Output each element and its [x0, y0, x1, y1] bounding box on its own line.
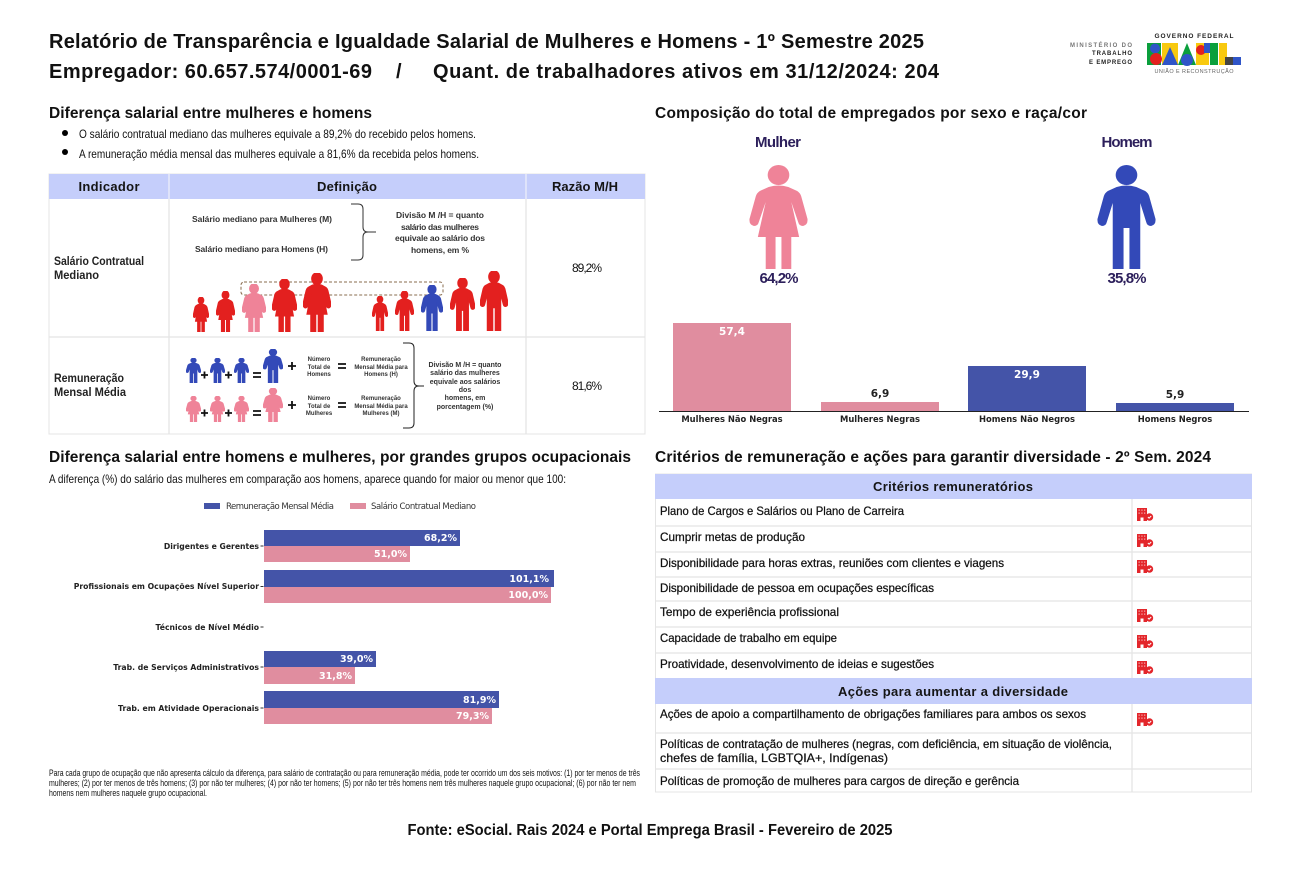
- heading: grandes grupos ocupacionais: Diferença salarial entre homens e mulheres, por grandes grupos ocupacionais: [49, 449, 631, 466]
- bar chart: grupos ocupacionais: Profissionais em Ocupações Nível Superior: [74, 582, 259, 591]
- definição: remuneração média: dos: [459, 387, 471, 394]
- subtítulo: A diferença (%) do salário das mulheres em comparação aos homens, aparece quando for maior ou menor que 100:: [49, 472, 566, 486]
- icons: empresa com check: [1137, 508, 1153, 726]
- bar chart: grupos ocupacionais: 81,9%: [463, 695, 496, 706]
- panel: critérios e ações: Plano de Cargos e Salários ou Plano de Carreira: [660, 504, 904, 518]
- bar chart: grupos ocupacionais: 79,3%: [456, 711, 489, 722]
- legenda: [204, 501, 476, 512]
- panel: tabela de indicadores: Indicador: [78, 179, 140, 194]
- panel: critérios e ações: Políticas de promoção de mulheres para cargos de direção e gerência: [660, 774, 1019, 788]
- panel: critérios e ações: Ações de apoio a compartilhamento de obrigações familiares para ambos os sexos: [660, 707, 1086, 721]
- panel: critérios e ações: Ações para aumentar a diversidade: [838, 684, 1068, 699]
- icon: homem 35,8%: Homem: [1102, 134, 1152, 151]
- definição: remuneração média: Mulheres (M): [362, 411, 400, 417]
- title: /: [396, 61, 402, 83]
- icon: mulher 64,2%: Mulher: [755, 134, 801, 151]
- heading: critérios: Critérios de remuneração e ações para garantir diversidade - 2º Sem. 2024: [655, 449, 1211, 466]
- bar chart: grupos ocupacionais: 31,8%: [319, 671, 352, 682]
- title: [49, 31, 940, 83]
- definição: salário mediano: homens, em %: [411, 245, 469, 255]
- title: Relatório de Transparência e Igualdade Salarial de Mulheres e Homens - 1º Semestre 2025: [49, 31, 924, 53]
- definição: remuneração média: [186, 343, 501, 428]
- logo: ministério e governo federal: TRABALHO: [1092, 51, 1132, 57]
- panel: critérios e ações: Critérios remuneratórios: [873, 479, 1033, 494]
- nota de rodapé: mulheres; (2) por ter menos de três homens; (3) por não ter mulheres; (4) por não ter homens; (5) por não ter três homens nem três mulheres naquele grupo ocupacional; (6) por não ter nem: [49, 778, 636, 788]
- fonte: Fonte: eSocial. Rais 2024 e Portal Emprega Brasil - Fevereiro de 2025: [408, 822, 893, 839]
- bar chart: composição: [659, 323, 1249, 424]
- definição: remuneração média: Total de: [308, 404, 331, 410]
- definição: remuneração média: Remuneração: [361, 357, 401, 363]
- logo: ministério e governo federal: [1070, 33, 1241, 75]
- bar chart: grupos ocupacionais: [74, 530, 554, 724]
- definição: remuneração média: porcentagem (%): [437, 404, 493, 411]
- bar chart: grupos ocupacionais: Trab. de Serviços Administrativos: [113, 663, 259, 672]
- definição: remuneração média: salário das mulheres: [430, 370, 500, 377]
- logo: ministério e governo federal: GOVERNO FEDERAL: [1154, 33, 1234, 40]
- bullets: A remuneração média mensal das mulheres equivale a 81,6% da recebida pelos homens.: [79, 147, 479, 161]
- logo: ministério e governo federal: MINISTÉRIO DO: [1070, 41, 1132, 49]
- panel: critérios e ações: Cumprir metas de produção: [660, 530, 805, 544]
- definição: salário mediano: equivale ao salário dos: [395, 233, 485, 243]
- panel: tabela de indicadores: 89,2%: [572, 261, 602, 275]
- panel: critérios e ações: Tempo de experiência profissional: [660, 605, 839, 619]
- panel: tabela de indicadores: Mediano: [54, 268, 99, 282]
- bar chart: composição: 5,9: [1166, 389, 1184, 401]
- definição: remuneração média: Total de: [308, 365, 331, 371]
- definição: remuneração média: Mensal Média para: [354, 404, 408, 410]
- icon: homem 35,8%: [1097, 134, 1156, 287]
- bar chart: grupos ocupacionais: Técnicos de Nível Médio: [156, 623, 259, 632]
- nota de rodapé: [49, 768, 640, 798]
- bar chart: grupos ocupacionais: 100,0%: [508, 590, 548, 601]
- nota de rodapé: homens nem mulheres naquele grupo ocupacional.: [49, 788, 207, 798]
- bar chart: grupos ocupacionais: 39,0%: [340, 654, 373, 665]
- definição: remuneração média: Mensal Média para: [354, 365, 408, 371]
- panel: critérios e ações: Capacidade de trabalho em equipe: [660, 631, 837, 645]
- definição: salário mediano: [192, 204, 508, 332]
- title: Quant. de trabalhadores ativos em 31/12/2024: 204: [433, 61, 940, 83]
- bar chart: composição: 29,9: [1014, 369, 1040, 381]
- icon: mulher 64,2%: [749, 134, 808, 287]
- bar chart: composição: 57,4: [719, 326, 745, 338]
- definição: remuneração média: Mulheres: [306, 411, 333, 417]
- definição: remuneração média: Remuneração: [361, 396, 401, 402]
- bar chart: grupos ocupacionais: 51,0%: [374, 549, 407, 560]
- panel: tabela de indicadores: [49, 174, 645, 434]
- panel: tabela de indicadores: Razão M/H: [552, 179, 618, 194]
- legenda: Remuneração Mensal Média: [226, 501, 334, 512]
- definição: remuneração média: Número: [308, 396, 331, 402]
- definição: salário mediano: Divisão M /H = quanto: [396, 210, 484, 220]
- definição: salário mediano: Salário mediano para Mulheres (M): [192, 214, 332, 224]
- heading: composição: Composição do total de empregados por sexo e raça/cor: [655, 105, 1087, 122]
- definição: remuneração média: homens, em: [445, 395, 485, 402]
- panel: critérios e ações: [655, 474, 1252, 792]
- legenda: Salário Contratual Mediano: [371, 502, 476, 512]
- panel: tabela de indicadores: Remuneração: [54, 371, 124, 385]
- panel: tabela de indicadores: Definição: [317, 179, 377, 194]
- logo: ministério e governo federal: E EMPREGO: [1089, 60, 1132, 66]
- title: Empregador: 60.657.574/0001-69: [49, 61, 372, 83]
- bar chart: grupos ocupacionais: 101,1%: [509, 574, 549, 585]
- bar chart: grupos ocupacionais: Dirigentes e Gerentes: [164, 542, 259, 551]
- bar chart: composição: Mulheres Negras: [840, 414, 920, 424]
- bar chart: grupos ocupacionais: Trab. em Atividade Operacionais: [118, 704, 259, 713]
- bar chart: composição: 6,9: [871, 388, 889, 400]
- bar chart: composição: Homens Não Negros: [979, 414, 1075, 424]
- panel: tabela de indicadores: Salário Contratual: [54, 254, 144, 268]
- definição: remuneração média: Homens: [307, 372, 331, 378]
- panel: tabela de indicadores: 81,6%: [572, 379, 602, 393]
- panel: critérios e ações: Disponibilidade para horas extras, reuniões com clientes e viagens: [660, 556, 1004, 570]
- heading: diferença salarial: Diferença salarial entre mulheres e homens: [49, 105, 372, 122]
- panel: critérios e ações: Disponibilidade de pessoa em ocupações específicas: [660, 581, 934, 595]
- nota de rodapé: Para cada grupo de ocupação que não apresenta cálculo da diferença, para salário de contratação ou para remuneração média, pode ter ocorrido um dos seis motivos: (1) por ter menos de três: [49, 768, 640, 778]
- icon: homem 35,8%: 35,8%: [1108, 270, 1146, 287]
- bar chart: composição: Mulheres Não Negras: [681, 414, 783, 424]
- bullets: [62, 127, 479, 161]
- bar chart: composição: Homens Negros: [1138, 414, 1212, 424]
- definição: remuneração média: Homens (H): [364, 372, 398, 378]
- icon: mulher 64,2%: 64,2%: [760, 270, 798, 287]
- definição: remuneração média: equivale aos salários: [430, 379, 500, 386]
- definição: salário mediano: salário das mulheres: [401, 222, 479, 232]
- panel: tabela de indicadores: Mensal Média: [54, 385, 126, 399]
- bar chart: grupos ocupacionais: 68,2%: [424, 533, 457, 544]
- panel: critérios e ações: Políticas de contratação de mulheres (negras, com deficiência, em situação de violência,: [660, 737, 1112, 751]
- panel: critérios e ações: chefes de família, LGBTQIA+, Indígenas): [660, 751, 888, 765]
- definição: remuneração média: Divisão M /H = quanto: [429, 362, 501, 369]
- definição: salário mediano: Salário mediano para Homens (H): [195, 244, 328, 254]
- definição: remuneração média: Número: [308, 357, 331, 363]
- logo: ministério e governo federal: UNIÃO E RECONSTRUÇÃO: [1154, 68, 1234, 75]
- panel: critérios e ações: Proatividade, desenvolvimento de ideias e sugestões: [660, 657, 934, 671]
- bullets: O salário contratual mediano das mulheres equivale a 89,2% do recebido pelos homens.: [79, 127, 476, 141]
